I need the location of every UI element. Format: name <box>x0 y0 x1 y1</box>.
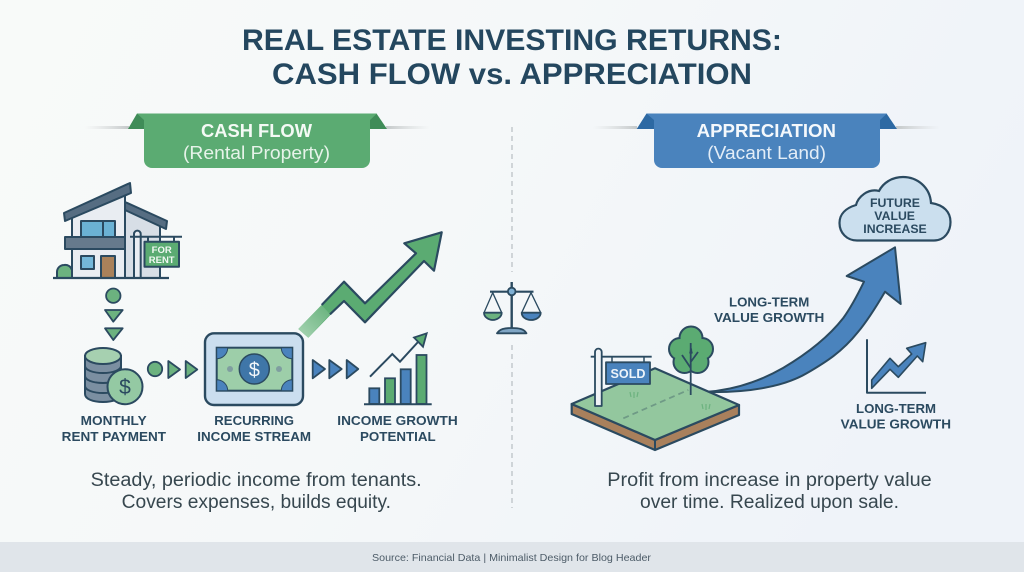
icon: land plot with sold sign and tree: SOLD <box>610 366 646 381</box>
text: appreciation description: over time. Realized upon sale. <box>640 492 899 513</box>
banner: cash flow: CASH FLOW <box>201 121 312 141</box>
icon: coin stack <box>85 348 142 404</box>
icon: rental house: RENT <box>149 255 175 266</box>
footer: Source: Financial Data | Minimalist Design for Blog Header <box>372 552 652 564</box>
footer <box>0 542 1024 572</box>
text: appreciation description <box>607 470 932 513</box>
labels: cash flow steps: INCOME GROWTH <box>337 413 458 428</box>
center divider <box>511 127 513 508</box>
flow arrow: house to payment <box>105 288 123 340</box>
title: REAL ESTATE INVESTING RETURNS: <box>242 24 782 57</box>
flow arrow: income to growth <box>313 360 358 378</box>
text: cash flow description <box>91 470 422 513</box>
label: long-term value growth: VALUE GROWTH <box>714 310 824 325</box>
label: long-term value growth chart: LONG-TERM <box>856 401 936 416</box>
label: long-term value growth <box>714 295 824 325</box>
growth arrow: green <box>298 232 442 338</box>
labels: cash flow steps <box>62 413 458 444</box>
labels: cash flow steps: INCOME STREAM <box>197 429 311 444</box>
icon: balance scale <box>484 282 541 333</box>
icon: rental house: FOR <box>152 245 172 256</box>
labels: cash flow steps: RENT PAYMENT <box>62 429 166 444</box>
icon: cloud future value increase <box>840 177 950 240</box>
text: appreciation description: Profit from increase in property value <box>607 470 932 491</box>
title <box>242 24 782 91</box>
label: long-term value growth: LONG-TERM <box>729 295 809 310</box>
text: cash flow description: Covers expenses, builds equity. <box>122 492 391 513</box>
label: long-term value growth chart: VALUE GROWTH <box>841 416 951 432</box>
banner: appreciation: APPRECIATION <box>697 121 836 141</box>
icon: rental house <box>53 183 182 278</box>
banner: cash flow: (Rental Property) <box>183 142 330 163</box>
banner: appreciation <box>593 114 940 168</box>
text: cash flow description: Steady, periodic income from tenants. <box>91 470 422 491</box>
banner: cash flow <box>85 114 430 168</box>
panel: cash flow <box>53 114 458 513</box>
labels: cash flow steps: MONTHLY <box>81 413 147 428</box>
labels: cash flow steps: POTENTIAL <box>360 429 436 444</box>
panel: appreciation <box>572 114 951 513</box>
label: long-term value growth chart <box>841 401 951 432</box>
icon: banknote in frame: $ <box>249 360 260 382</box>
icon: bar chart with trend <box>364 333 432 404</box>
icon: land plot with sold sign and tree <box>572 328 739 450</box>
flow arrow: payment to income <box>148 361 197 378</box>
labels: cash flow steps: RECURRING <box>214 413 294 428</box>
icon: coin stack: $ <box>119 376 131 399</box>
icon: mini growth chart <box>867 339 926 393</box>
icon: cloud future value increase: FUTURE <box>870 196 920 210</box>
icon: cloud future value increase: VALUE <box>874 209 915 223</box>
growth arrow: blue curve <box>705 247 901 392</box>
banner: appreciation: (Vacant Land) <box>707 142 826 163</box>
icon: cloud future value increase: INCREASE <box>863 222 927 236</box>
title: CASH FLOW vs. APPRECIATION <box>272 58 752 91</box>
icon: banknote in frame <box>205 333 303 405</box>
